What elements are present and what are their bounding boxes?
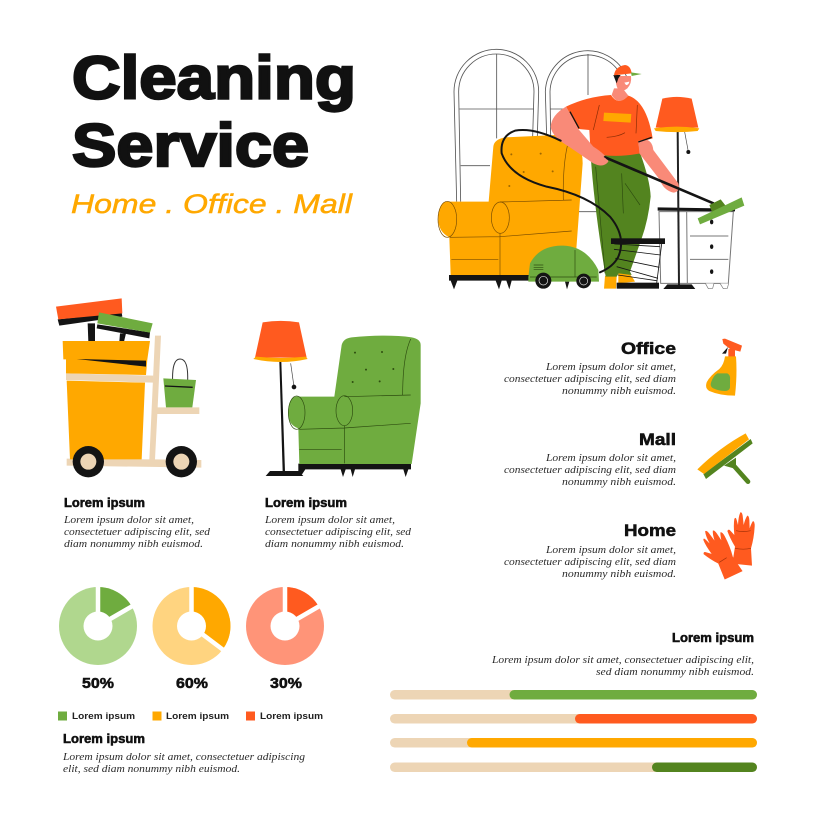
vacuum nozzle — [698, 197, 744, 224]
brushes — [56, 298, 153, 342]
donut chart: 30% — [246, 584, 324, 665]
bin — [63, 341, 153, 459]
vacuum hose and wand — [501, 130, 713, 272]
chair — [288, 336, 421, 477]
text block: cart: Lorem ipsum dolor sit amet, — [63, 514, 194, 526]
text block: mall — [504, 430, 676, 488]
text block: mall: Mall — [639, 430, 676, 449]
bar chart — [390, 690, 757, 772]
cart frame — [67, 336, 201, 468]
text block: home: Home — [624, 521, 676, 540]
text block: donut notes — [62, 731, 306, 775]
hand over wand — [593, 155, 608, 164]
legend — [58, 711, 323, 722]
text block: armchair: Lorem ipsum dolor sit amet, — [264, 514, 395, 526]
text block: cart: diam nonummy nibh euismod. — [64, 538, 203, 550]
subtitle: Home . Office . Mall — [71, 189, 353, 219]
illustration: cleaning cart — [56, 298, 201, 477]
text block: cart: Lorem ipsum — [64, 496, 145, 510]
legend: Lorem ipsum — [166, 711, 229, 722]
text block: donut notes: Lorem ipsum — [63, 731, 145, 746]
text block: donut notes: Lorem ipsum dolor sit amet, consectetuer adipiscing — [62, 751, 306, 763]
text block: armchair: consectetuer adipiscing elit, sed — [265, 526, 412, 538]
armchair — [438, 135, 583, 289]
text block: office: Office — [621, 339, 676, 358]
side table — [658, 207, 735, 289]
text block: cart — [63, 496, 211, 550]
windows — [454, 49, 627, 212]
text block: home: Lorem ipsum dolor sit amet, — [545, 544, 676, 556]
waste basket — [611, 238, 665, 289]
text block: bars heading — [491, 631, 754, 678]
text block: mall: nonummy nibh euismod. — [562, 476, 676, 488]
icon: squeegee — [697, 433, 753, 482]
illustration: cleaner vacuuming a room — [438, 49, 744, 289]
text block: mall: Lorem ipsum dolor sit amet, — [545, 452, 676, 464]
illustration: green armchair with lamp — [253, 321, 421, 477]
text block: office: consectetuer adipiscing elit, sed diam — [504, 373, 676, 385]
percent labels: 50% — [82, 675, 114, 692]
floor lamp — [654, 97, 699, 289]
text block: armchair — [264, 496, 412, 550]
icon: spray bottle — [706, 339, 742, 396]
text block: bars heading: Lorem ipsum — [672, 631, 754, 645]
donut chart: 60% — [152, 584, 230, 665]
text block: office: nonummy nibh euismod. — [562, 385, 676, 397]
icon: rubber gloves — [694, 512, 755, 584]
text block: bars heading: Lorem ipsum dolor sit amet, consectetuer adipiscing elit, — [491, 654, 754, 666]
text block: armchair: diam nonummy nibh euismod. — [265, 538, 404, 550]
wheels — [73, 446, 197, 477]
title: Service — [72, 112, 309, 179]
text block: home: consectetuer adipiscing elit, sed diam — [504, 556, 676, 568]
text block: mall: consectetuer adipiscing elit, sed diam — [504, 464, 676, 476]
percent labels — [82, 675, 302, 692]
percent labels: 60% — [176, 675, 208, 692]
text block: home: nonummy nibh euismod. — [562, 568, 676, 580]
title — [72, 44, 356, 179]
text block: office: Lorem ipsum dolor sit amet, — [545, 361, 676, 373]
text block: cart: consectetuer adipiscing elit, sed — [64, 526, 211, 538]
percent labels: 30% — [270, 675, 302, 692]
title: Cleaning — [72, 44, 356, 112]
vacuum cleaner — [528, 246, 599, 289]
cleaner — [551, 65, 679, 289]
lamp — [253, 321, 308, 476]
donut chart: 50% — [59, 584, 137, 665]
text block: home — [504, 521, 676, 580]
legend: Lorem ipsum — [72, 711, 135, 722]
text block: armchair: Lorem ipsum — [265, 496, 347, 510]
bucket — [163, 359, 196, 407]
text block: office — [504, 339, 676, 397]
text block: bars heading: sed diam nonummy nibh euismod. — [596, 666, 754, 678]
text block: donut notes: elit, sed diam nonummy nibh euismod. — [63, 763, 240, 775]
legend: Lorem ipsum — [260, 711, 323, 722]
